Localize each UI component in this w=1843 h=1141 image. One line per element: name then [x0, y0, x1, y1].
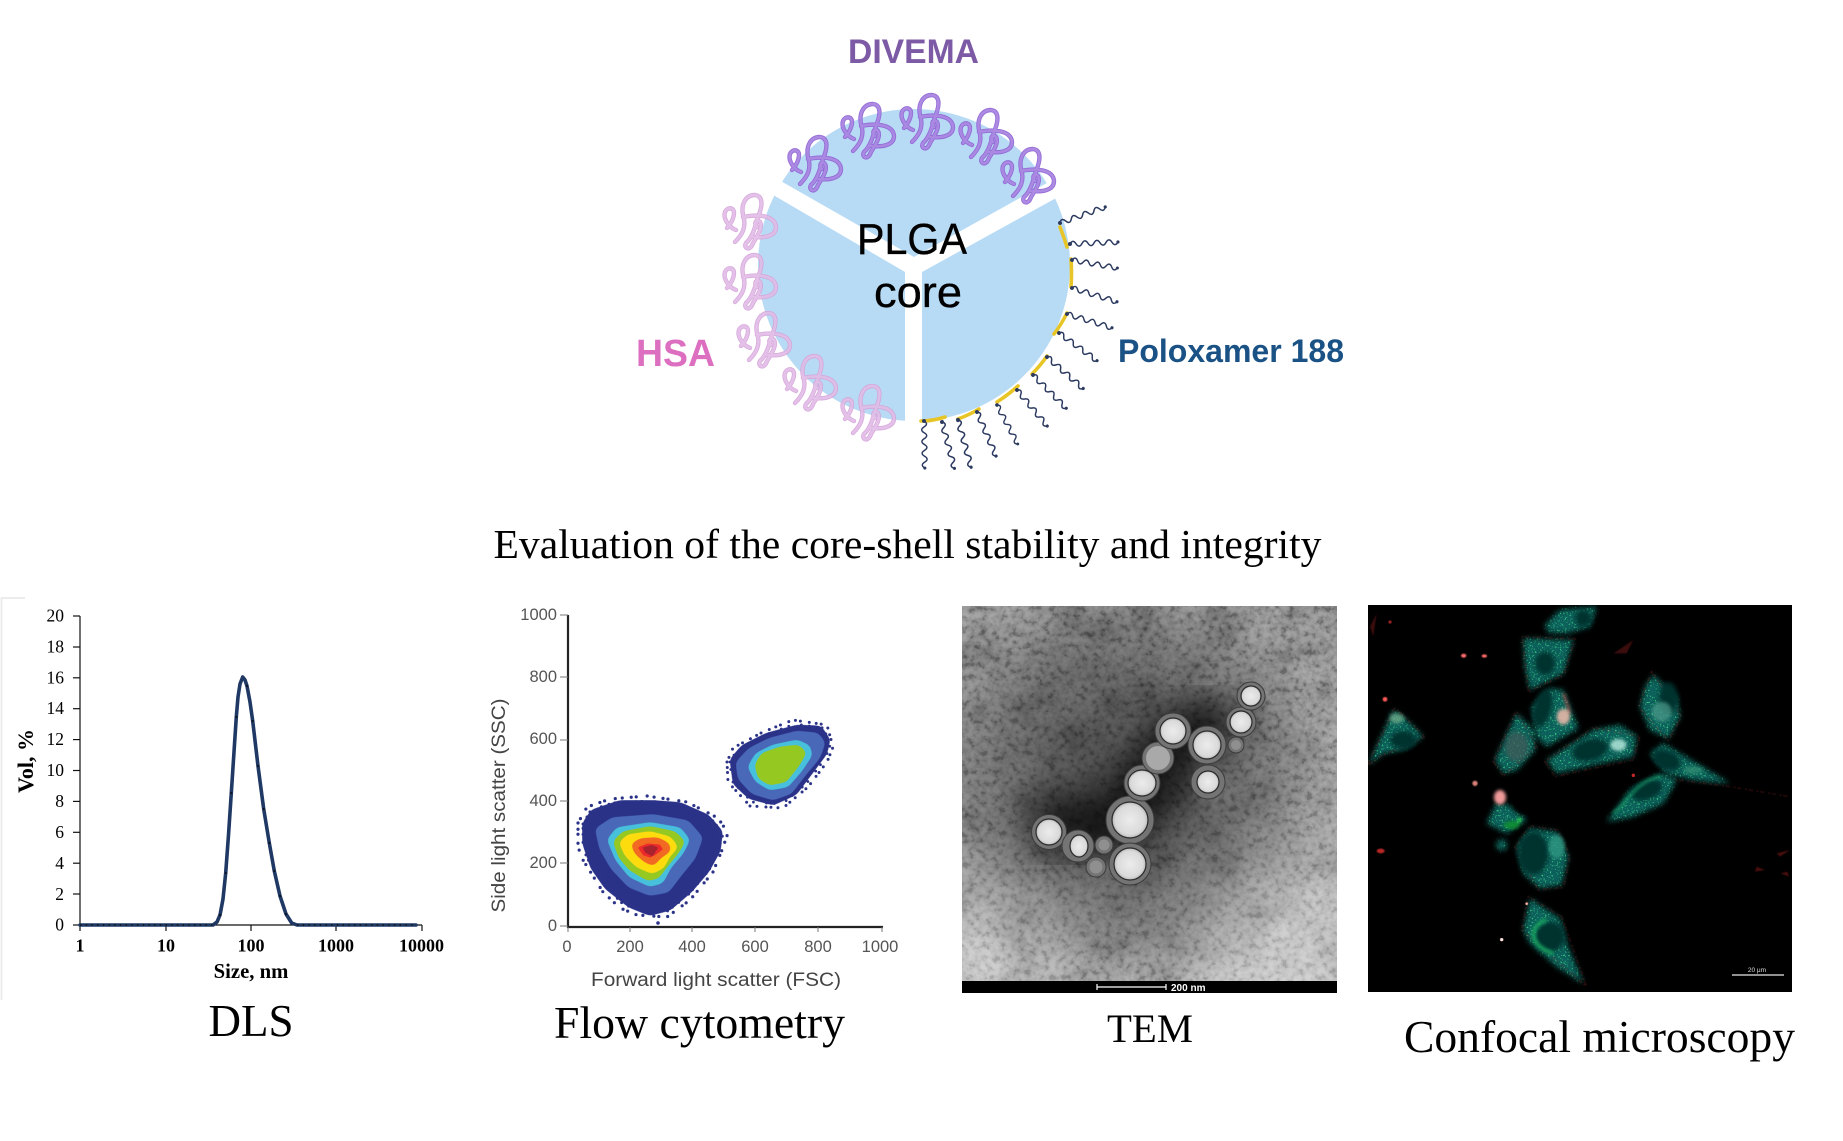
y axis tick labels: 8	[55, 791, 64, 811]
y axis tick labels: 10	[46, 760, 64, 780]
panel: flow cytometry plot	[489, 606, 898, 1048]
x axis with ticks	[80, 925, 422, 931]
caption: Confocal microscopy: Confocal microscopy	[1404, 1011, 1795, 1062]
axes	[560, 615, 883, 932]
x axis tick labels: 10	[157, 936, 175, 956]
DIVEMA coils on top segment	[790, 95, 1054, 202]
label: Poloxamer 188: Poloxamer 188	[1118, 333, 1344, 369]
nuclei	[1390, 610, 1684, 952]
x tick labels: 200	[616, 938, 644, 956]
HSA coils on left segment	[725, 195, 894, 439]
red membrane speckle	[1367, 637, 1790, 987]
label: DIVEMA: DIVEMA	[848, 33, 979, 71]
x tick labels: 0	[562, 938, 572, 956]
y axis tick labels: 14	[46, 698, 64, 718]
y axis tick labels: 20	[46, 606, 64, 626]
scale bar strip: 200 nm	[1171, 983, 1206, 994]
size distribution curve	[80, 677, 416, 925]
y axis title: Vol, %	[13, 729, 38, 793]
y tick labels: 0	[548, 917, 557, 935]
x axis tick labels: 1000	[318, 936, 354, 956]
x axis tick labels: 1	[76, 936, 84, 956]
density cloud: upper population	[727, 720, 833, 808]
x axis tick labels: 10000	[399, 936, 444, 956]
y tick labels: 800	[529, 668, 557, 686]
x tick labels: 800	[804, 938, 832, 956]
panel: TEM micrograph	[962, 606, 1337, 1051]
panel: DLS chart	[2, 598, 444, 1046]
x axis title: Size, nm	[214, 961, 288, 983]
scale bar	[1732, 967, 1784, 975]
y axis tick labels: 12	[46, 729, 64, 749]
label: PLGA core: core	[874, 268, 962, 317]
label: PLGA core	[857, 215, 968, 317]
label: HSA: HSA	[636, 333, 715, 375]
y axis tick labels: 2	[55, 884, 64, 904]
y axis with ticks	[73, 616, 80, 925]
panel: confocal microscopy image	[1367, 605, 1795, 1062]
y tick labels: 600	[529, 730, 557, 748]
y tick labels: 200	[529, 854, 557, 872]
caption: Flow cytometry: Flow cytometry	[554, 997, 845, 1048]
title: Evaluation of the core-shell stability and integrity	[494, 521, 1322, 567]
scale bar strip	[962, 981, 1337, 994]
x tick labels: 1000	[862, 938, 898, 956]
y tick labels	[520, 606, 557, 935]
y axis tick labels	[46, 606, 64, 934]
y axis tick labels: 18	[46, 636, 64, 656]
x axis tick labels: 100	[238, 936, 264, 956]
red spots	[1370, 613, 1790, 941]
x tick labels	[562, 938, 898, 956]
caption: TEM: TEM	[1107, 1006, 1193, 1051]
x axis tick labels	[76, 936, 444, 956]
y axis tick labels: 0	[55, 914, 64, 934]
nanoparticle diagram	[636, 33, 1344, 471]
y axis title: Side light scatter (SSC)	[489, 698, 510, 912]
y tick labels: 400	[529, 792, 557, 810]
x tick labels: 600	[741, 938, 769, 956]
PLGA core sphere divided into three segments	[758, 109, 1070, 425]
x axis title: Forward light scatter (FSC)	[591, 970, 841, 991]
micrograph background	[962, 606, 1337, 981]
poloxamer 188 anchor segments and tails	[921, 204, 1120, 471]
nanoparticles	[1032, 682, 1265, 885]
stained cells	[1367, 607, 1790, 987]
y axis tick labels: 6	[55, 822, 64, 842]
label: PLGA core: PLGA	[857, 215, 968, 264]
y axis tick labels: 4	[55, 853, 64, 873]
density cloud: lower population	[578, 796, 728, 925]
caption: DLS: DLS	[208, 996, 294, 1046]
y tick labels: 1000	[520, 606, 557, 624]
x tick labels: 400	[678, 938, 706, 956]
scale bar: 20 μm	[1748, 967, 1766, 974]
y axis tick labels: 16	[46, 668, 64, 688]
bright puncta	[1389, 693, 1703, 953]
